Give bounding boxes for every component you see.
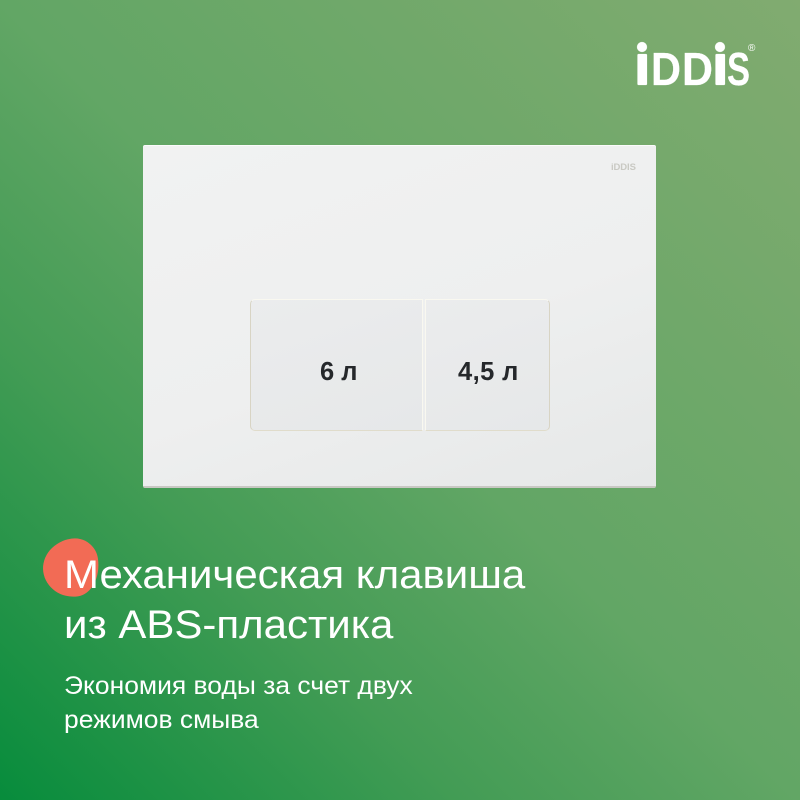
heading: [64, 553, 526, 647]
logo: iddis: D: [682, 43, 713, 95]
label: 6 л: 6 л: [320, 358, 357, 386]
accent blob: [39, 535, 103, 601]
subheading: Экономия воды за счет двух: [64, 672, 413, 700]
subheading: режимов смыва: [64, 706, 259, 734]
heading: Механическая клавиша: [64, 553, 525, 597]
subheading: [64, 672, 413, 734]
panel: flush plate: [143, 145, 656, 488]
logo: iddis: ®: [748, 43, 756, 54]
logo: iddis: [636, 42, 756, 95]
logo: iddis: S: [727, 43, 750, 95]
button: 6 litres: [250, 299, 423, 431]
label: 4,5 л: 4,5 л: [458, 358, 519, 386]
button: 4,5 litres: [425, 299, 550, 431]
logo: iddis: D: [651, 43, 681, 95]
heading: из ABS-пластика: [64, 603, 393, 647]
plate logo: iDDIS: [611, 162, 636, 173]
